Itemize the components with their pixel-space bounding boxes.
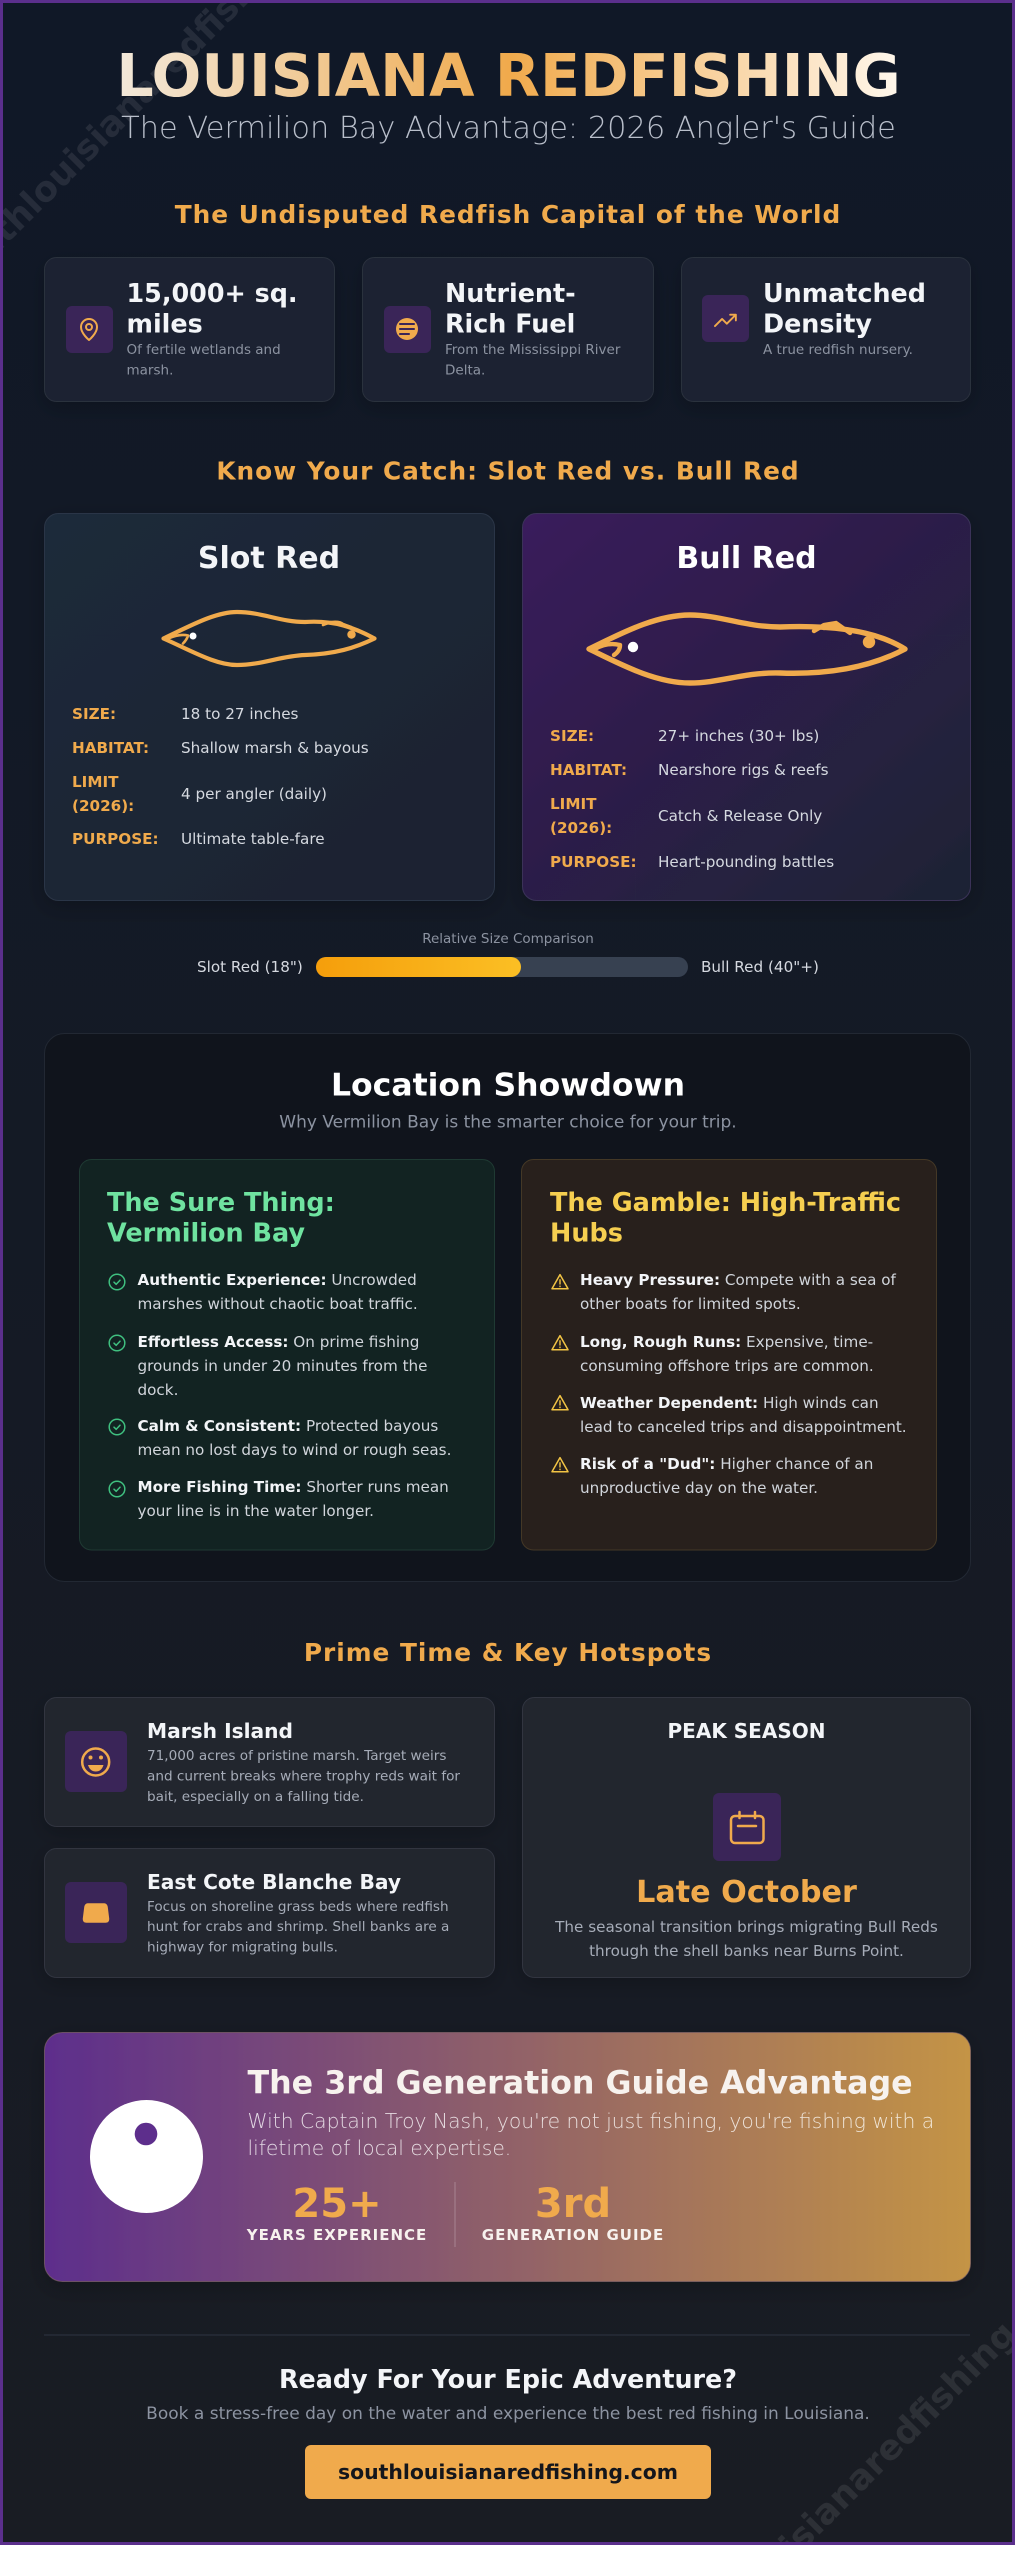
gamble list: Weather Dependent: High winds can (580, 1394, 879, 1412)
banner heading: The 3rd Generation Guide Advantage (248, 2066, 913, 2102)
stat description: From the Mississippi River (445, 342, 620, 358)
showdown subheading: Why Vermilion Bay is the smarter choice for your trip. (279, 1112, 737, 1132)
icon: smile (65, 1731, 127, 1792)
peak season description: through the shell banks near Burns Point. (589, 1942, 904, 1960)
stat: generation: 3rd (535, 2181, 611, 2227)
east cote heading: East Cote Blanche Bay (147, 1870, 401, 1894)
panel: stat nutrient (362, 258, 654, 402)
gamble list: other boats for limited spots. (580, 1295, 801, 1313)
banner text: With Captain Troy Nash, you're not just fishing, you're fishing with a (248, 2109, 934, 2133)
stat heading: Rich Fuel (445, 308, 575, 338)
panel: marsh island (44, 1698, 494, 1826)
marsh island description: 71,000 acres of pristine marsh. Target weirs (147, 1748, 446, 1764)
panel: the gamble (522, 1160, 936, 1550)
stat heading: 15,000+ sq. (126, 278, 298, 308)
gamble list: Risk of a "Dud": Higher chance of an (580, 1455, 873, 1473)
east cote description: highway for migrating bulls. (147, 1940, 338, 1956)
sure thing heading: Vermilion Bay (107, 1218, 305, 1248)
stat heading: Unmatched (763, 278, 926, 308)
sure thing list: grounds in under 20 minutes from the (138, 1357, 428, 1375)
icon: checks (109, 1274, 125, 1497)
bull red spec table: PURPOSE: (550, 853, 637, 871)
slot red spec table: Ultimate table-fare (181, 830, 325, 848)
icon: guide avatar (90, 2100, 203, 2213)
marsh island description: and current breaks where trophy reds wait for (147, 1768, 460, 1784)
gamble list: consuming offshore trips are common. (580, 1357, 874, 1375)
gamble list: Long, Rough Runs: Expensive, time- (580, 1333, 873, 1351)
peak season description: The seasonal transition brings migrating Bull Reds (555, 1918, 938, 1936)
icon: trend (702, 295, 749, 342)
slot red spec table: 4 per angler (daily) (181, 785, 327, 803)
bull red heading: Bull Red (676, 541, 817, 576)
stat: generation: GENERATION GUIDE (482, 2226, 664, 2244)
panel: stat density (682, 258, 970, 402)
slot red spec table: (2026): (72, 797, 134, 815)
stat description: Of fertile wetlands and (126, 342, 281, 358)
sure thing heading: The Sure Thing: (107, 1188, 335, 1218)
bull label: Bull Red (40"+) (701, 958, 819, 976)
icon: warnings (552, 1275, 568, 1472)
slot red spec table (72, 705, 369, 848)
footer heading: Ready For Your Epic Adventure? (279, 2364, 737, 2394)
slot red spec table: 18 to 27 inches (181, 705, 299, 723)
slot red heading: Slot Red (198, 541, 340, 576)
bull red spec table: HABITAT: (550, 761, 627, 779)
slot red spec table: SIZE: (72, 705, 116, 723)
panel: stat wetlands (44, 258, 334, 402)
gamble list: Heavy Pressure: Compete with a sea of (580, 1271, 896, 1289)
stat description: marsh. (126, 362, 173, 378)
sure thing list: marshes without chaotic boat traffic. (138, 1295, 418, 1313)
stat heading: miles (126, 308, 203, 338)
slot red spec table: LIMIT (72, 773, 118, 791)
icon: nutrient (384, 306, 431, 353)
panel: the sure thing (80, 1160, 494, 1550)
stat: generation (482, 2181, 664, 2244)
sure thing list: Effortless Access: On prime fishing (138, 1333, 419, 1351)
panel: bull red (522, 514, 970, 900)
panel: guide banner (44, 2032, 970, 2282)
chart caption: Relative Size Comparison (422, 931, 594, 947)
icon: map pin (66, 306, 113, 353)
sure thing list: your line is in the water longer. (138, 1502, 374, 1520)
panel: peak season (522, 1698, 970, 1978)
stat description: Delta. (445, 362, 485, 378)
heading: prime time: Prime Time & Key Hotspots (304, 1638, 712, 1667)
gamble list: lead to canceled trips and disappointment. (580, 1418, 907, 1436)
peak season value: Late October (636, 1875, 857, 1910)
slot red spec table: PURPOSE: (72, 830, 159, 848)
peak season heading: PEAK SEASON (668, 1719, 825, 1743)
icon: calendar (713, 1793, 781, 1861)
slot red spec table: Shallow marsh & bayous (181, 739, 369, 757)
footer text: Book a stress-free day on the water and experience the best red fishing in Louisiana. (146, 2404, 870, 2424)
title: LOUISIANA REDFISHING (116, 42, 901, 110)
east cote description: Focus on shoreline grass beds where redfish (147, 1899, 449, 1915)
banner text: lifetime of local expertise. (248, 2136, 511, 2160)
bull red spec table: 27+ inches (30+ lbs) (658, 727, 819, 745)
bull red spec table: Catch & Release Only (658, 807, 822, 825)
subtitle: The Vermilion Bay Advantage: 2026 Angler's Guide (121, 111, 896, 146)
bull red spec table: Heart-pounding battles (658, 853, 834, 871)
sure thing list: Calm & Consistent: Protected bayous (138, 1417, 438, 1435)
sure thing list (138, 1271, 451, 1520)
bull red spec table: (2026): (550, 819, 612, 837)
east cote description: hunt for crabs and shrimp. Shell banks are a (147, 1919, 449, 1935)
gamble heading: The Gamble: High-Traffic (550, 1188, 901, 1218)
stat: years (246, 2181, 427, 2244)
heading: capital of the world: The Undisputed Redfish Capital of the World (175, 200, 841, 229)
gamble list: unproductive day on the water. (580, 1479, 818, 1497)
button: website: southlouisianaredfishing.com (338, 2460, 678, 2484)
bull red spec table: Nearshore rigs & reefs (658, 761, 829, 779)
icon: bag (65, 1882, 127, 1943)
panel: location showdown (44, 1034, 970, 1582)
heading: know your catch: Know Your Catch: Slot Red vs. Bull Red (216, 456, 800, 486)
icon: slot red fish (164, 612, 374, 665)
marsh island heading: Marsh Island (147, 1719, 293, 1743)
sure thing list: dock. (138, 1381, 178, 1399)
slot red spec table: HABITAT: (72, 739, 149, 757)
stat: years: YEARS EXPERIENCE (246, 2226, 427, 2244)
marsh island description: bait, especially on a falling tide. (147, 1789, 364, 1805)
showdown heading: Location Showdown (331, 1068, 685, 1104)
sure thing list: More Fishing Time: Shorter runs mean (138, 1478, 449, 1496)
slot label: Slot Red (18") (197, 958, 303, 976)
stat: years: 25+ (292, 2181, 382, 2227)
bar track (316, 957, 688, 977)
stat heading: Density (763, 308, 872, 338)
bar fill (316, 957, 521, 977)
sure thing list: mean no lost days to wind or rough seas. (138, 1441, 451, 1459)
icon: bull red fish (589, 615, 905, 683)
panel: slot red (44, 514, 494, 900)
bull red spec table (550, 727, 834, 871)
chart: relative size comparison (197, 931, 819, 977)
gamble heading: Hubs (550, 1218, 623, 1248)
stat heading: Nutrient- (445, 278, 576, 308)
panel: east cote blanche bay (44, 1848, 494, 1978)
gamble list (580, 1271, 907, 1497)
sure thing list: Authentic Experience: Uncrowded (138, 1271, 417, 1289)
bull red spec table: SIZE: (550, 727, 594, 745)
bull red spec table: LIMIT (550, 795, 596, 813)
button: website (305, 2445, 711, 2499)
stat description: A true redfish nursery. (763, 342, 913, 358)
